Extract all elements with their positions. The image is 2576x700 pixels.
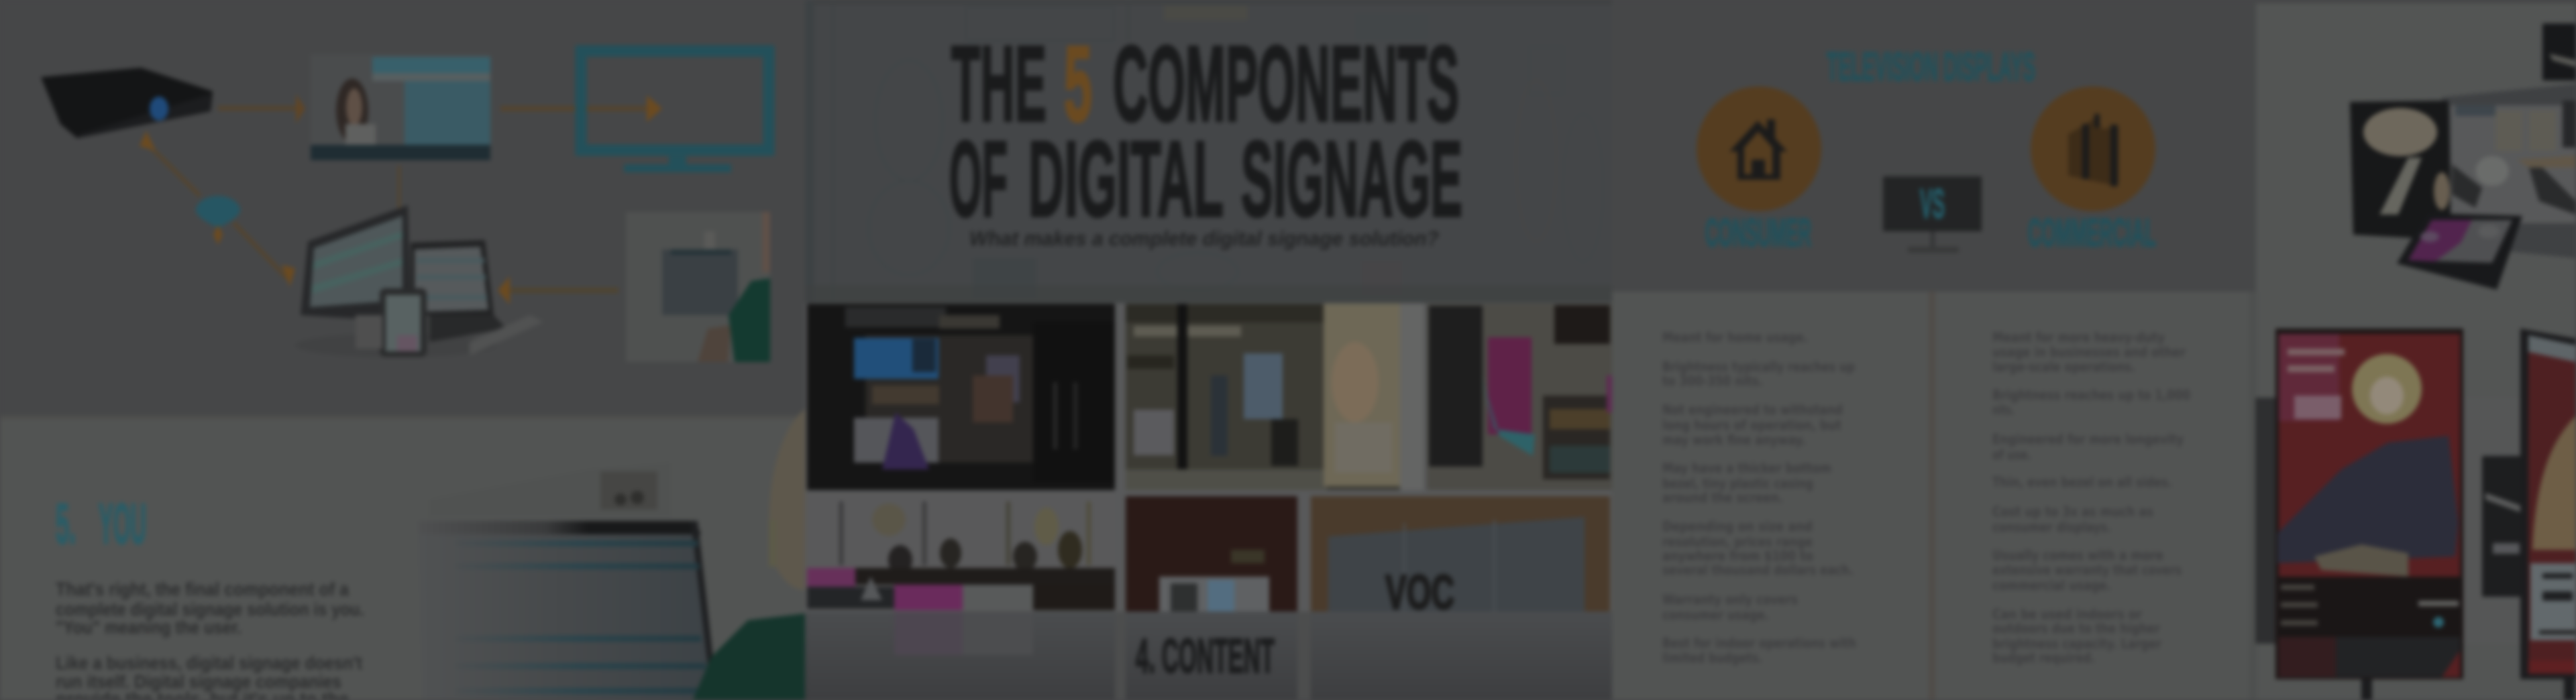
text block: consumer list: resolution, prices range	[1662, 534, 1813, 550]
panel: display products	[2249, 0, 2576, 700]
image: screen content	[311, 54, 490, 160]
image: display stand right	[2564, 679, 2575, 700]
photo: video wall	[1311, 496, 1610, 620]
photo: video wall: VOC	[1385, 566, 1454, 620]
text block: consumer list: Depending on size and	[1662, 518, 1813, 534]
panel: 5. You: YOU	[99, 492, 146, 555]
icon: media player	[41, 68, 213, 138]
image: display stand left	[2361, 679, 2372, 700]
text block: commercial list: extensive warranty that covers	[1992, 562, 2182, 578]
text block: commercial list: large-scale operations.	[1992, 359, 2135, 375]
title: DIGITAL	[1028, 119, 1224, 239]
title: 5	[1064, 23, 1092, 143]
content caption band	[805, 611, 1612, 700]
text block: commercial list: commercial usage.	[1992, 577, 2111, 593]
panel: content photo grid	[805, 303, 1612, 700]
panel: header	[805, 0, 1612, 304]
text block: commercial list: nits.	[1992, 402, 2015, 418]
panel: comparison lists	[1612, 292, 2249, 700]
icon: commercial building	[2031, 86, 2155, 211]
text block: consumer list: to 300-350 nits.	[1662, 373, 1763, 389]
icon: display outline	[581, 51, 769, 172]
panel: television displays header: CONSUMER	[1705, 211, 1811, 255]
title: OF	[949, 119, 1008, 239]
panel: television displays header: TELEVISION DISPLAYS	[1827, 44, 2035, 89]
panel: 5. You	[0, 409, 805, 700]
text block: commercial list: Cost up to 3x as much as	[1992, 504, 2153, 520]
icon: vs monitor	[1883, 176, 1982, 253]
arrow: content to display	[500, 95, 662, 122]
text block: consumer list: Best for indoor operations with	[1662, 635, 1856, 651]
text block: commercial list: brightness capacity. Larger	[1992, 636, 2161, 652]
text block: consumer list: bezel, tiny plastic casing	[1662, 475, 1813, 491]
image: person at laptop	[418, 409, 805, 700]
heading: 5. You	[56, 492, 146, 555]
icon: wifi pin	[196, 196, 240, 245]
text block: second paragraph: run itself. Digital signage companies	[56, 671, 341, 692]
photo: dark store	[807, 304, 1115, 490]
image: portrait display left	[2275, 329, 2463, 679]
text block: consumer list: around the screen.	[1662, 489, 1783, 506]
arrow: user to computers	[498, 276, 619, 304]
text block: commercial list	[1992, 329, 2190, 666]
text block: consumer list: anywhere from $100 to	[1662, 548, 1813, 564]
text block: first paragraph: complete digital signage solution is you.	[56, 599, 364, 620]
panel: television displays header	[1612, 0, 2256, 292]
icon: vs monitor: VS	[1920, 181, 1945, 227]
text block: second paragraph: Like a business, digital signage doesn't	[56, 652, 362, 673]
arrow: player to content	[218, 94, 305, 123]
text block: consumer list: May have a thicker bottom	[1662, 460, 1831, 476]
icon: consumer house	[1697, 86, 1821, 211]
text block: commercial list: Meant for more heavy-duty	[1992, 329, 2165, 345]
image: portrait display right	[2520, 329, 2576, 679]
panel: header: COMPONENTS	[1113, 23, 1459, 143]
panel: hardware diagram	[0, 0, 805, 418]
text block: consumer list: long hours of operation, but	[1662, 417, 1841, 433]
image: monitor and tablet	[2350, 23, 2576, 290]
text block: first paragraph: That's right, the final component of a	[56, 579, 349, 599]
text block: commercial list: Brightness reaches up to 1,000	[1992, 387, 2190, 403]
text block: commercial list: of use.	[1992, 447, 2031, 463]
text block: commercial list: Thin, even bezel on all sides.	[1992, 474, 2172, 490]
arrow: content to computers	[398, 166, 400, 209]
text block: first paragraph: "You" meaning the user.	[56, 617, 241, 638]
image: computer devices	[295, 205, 543, 357]
photo: store entrance	[1126, 304, 1424, 490]
text block: consumer list: limited budgets.	[1662, 650, 1762, 666]
divider	[1929, 292, 1935, 700]
text block: commercial list: Can be used indoors or	[1992, 606, 2142, 622]
text block: consumer list: Warranty only covers	[1662, 591, 1798, 607]
text block: consumer list: several thousand dollars each.	[1662, 562, 1854, 578]
text block: second paragraph	[56, 652, 362, 700]
text block: consumer list: consumer usage.	[1662, 607, 1769, 623]
text block: consumer list: may work fine anyway.	[1662, 432, 1806, 448]
arrow: wifi to player	[140, 131, 200, 196]
text block: consumer list	[1662, 329, 1856, 666]
image: gray band behind posters	[2255, 398, 2522, 644]
panel: television displays header: COMMERCIAL	[2028, 211, 2156, 255]
heading: 5. You: 5.	[56, 492, 76, 555]
text block: commercial list: budget required.	[1992, 650, 2095, 666]
text block: commercial list: usage in businesses and other	[1992, 344, 2186, 360]
panel: header: SIGNAGE	[1241, 119, 1462, 239]
arrow: wifi to computers	[233, 223, 295, 287]
text block: commercial list: Usually comes with a more	[1992, 547, 2163, 563]
text block: commercial list: Engineered for more longevity	[1992, 431, 2184, 447]
text block: commercial list: outdoors due to the higher	[1992, 620, 2160, 636]
content caption band: 4. CONTENT	[1136, 630, 1275, 683]
text block: consumer list: Meant for home usage.	[1662, 329, 1808, 345]
text block: first paragraph	[56, 579, 364, 638]
subtitle: What makes a complete digital signage solution?	[969, 227, 1439, 250]
text block: commercial list: consumer displays.	[1992, 519, 2111, 535]
image: user at computer	[626, 212, 770, 362]
text block: consumer list: Brightness typically reaches up	[1662, 359, 1855, 375]
photo: dark wall display	[1126, 496, 1297, 611]
photo: retail aisle	[1427, 304, 1612, 490]
title	[949, 23, 1462, 239]
photo: shop shelves	[807, 493, 1115, 611]
title: THE	[951, 23, 1046, 143]
text block: consumer list: Not engineered to withstand	[1662, 402, 1843, 418]
